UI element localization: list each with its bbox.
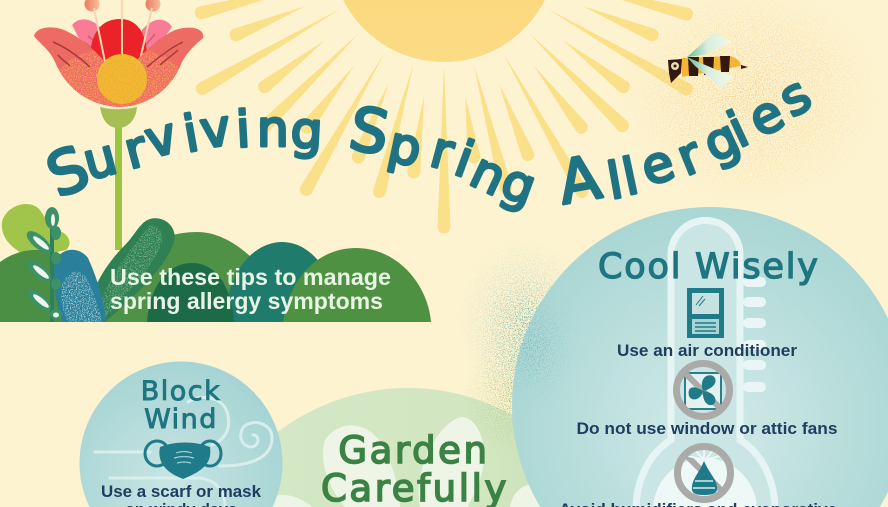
cool heading: Cool Wisely <box>598 247 818 287</box>
flower outer petals <box>34 27 203 107</box>
title: s <box>769 65 821 128</box>
garden disc <box>193 388 623 507</box>
flower calyx <box>100 107 137 128</box>
left hill <box>0 250 110 322</box>
title: g <box>289 101 324 161</box>
flower centre <box>97 54 147 104</box>
middle hill <box>88 232 300 322</box>
teal hill <box>225 242 340 322</box>
panel: garden carefully <box>193 340 623 507</box>
block wind heading: Wind <box>144 404 218 435</box>
title: g <box>695 108 748 174</box>
title: n <box>462 141 515 207</box>
fan label: Do not use window or attic fans <box>576 419 838 438</box>
title: u <box>77 127 123 192</box>
blue leaf grain <box>61 272 102 322</box>
flower centre grain <box>96 58 148 110</box>
dark green leaf grain <box>98 225 162 318</box>
block wind label line 1: Use a scarf or mask <box>101 482 262 501</box>
block wind heading: Block <box>141 376 221 407</box>
flower <box>34 0 203 250</box>
icon: mask <box>145 441 221 479</box>
light green leaf <box>2 204 69 258</box>
flower stamen filaments <box>94 0 152 62</box>
air conditioner label: Use an air conditioner <box>617 341 797 360</box>
cool disc <box>512 207 888 507</box>
garden heading: Garden <box>338 429 490 472</box>
panel: intro hills <box>0 204 431 322</box>
panel: block wind <box>80 362 282 507</box>
sun <box>331 0 557 62</box>
orange pollen spray <box>615 0 885 210</box>
flower stamen heads <box>84 0 160 12</box>
title: i <box>179 104 203 164</box>
disc teal grain <box>475 273 585 417</box>
title: i <box>720 100 757 159</box>
title: v <box>197 98 234 160</box>
white leaves <box>262 417 545 507</box>
icon: no humidifier <box>678 446 730 500</box>
title: p <box>384 115 427 178</box>
title: l <box>617 147 643 207</box>
title: r <box>118 119 153 181</box>
panel: cool wisely <box>475 207 888 507</box>
right hill <box>283 248 431 322</box>
flower petal veins <box>53 42 183 67</box>
flower petal grain <box>58 48 182 108</box>
title: e <box>634 133 681 197</box>
title: v <box>139 106 183 170</box>
dark green leaf <box>85 218 175 322</box>
icon: air conditioner <box>687 288 724 338</box>
intro text line 1: Use these tips to manage <box>110 264 391 290</box>
title: S <box>344 94 394 169</box>
teal pollen spray <box>455 235 595 405</box>
fern <box>23 207 62 322</box>
green spray <box>460 340 570 460</box>
thermometer <box>636 220 775 507</box>
title: A <box>553 143 606 219</box>
title: i <box>235 100 252 159</box>
wind disc <box>80 362 282 507</box>
flower red petal <box>90 19 147 75</box>
title: r <box>669 125 710 187</box>
flower back petals <box>72 19 172 60</box>
intro text line 2: spring allergy symptoms <box>110 288 383 314</box>
title: r <box>425 121 460 182</box>
sun rays <box>193 0 695 234</box>
title: l <box>603 151 627 211</box>
title: S <box>37 133 99 212</box>
title: e <box>739 83 793 149</box>
wind swirls <box>95 397 272 507</box>
bee <box>668 32 748 88</box>
dark hill <box>147 263 234 322</box>
title: i <box>448 130 481 189</box>
title: n <box>257 100 289 158</box>
icon: flower stem <box>115 125 122 250</box>
blue leaf <box>54 250 106 322</box>
icon: no fan <box>676 364 730 416</box>
title: g <box>494 152 544 217</box>
